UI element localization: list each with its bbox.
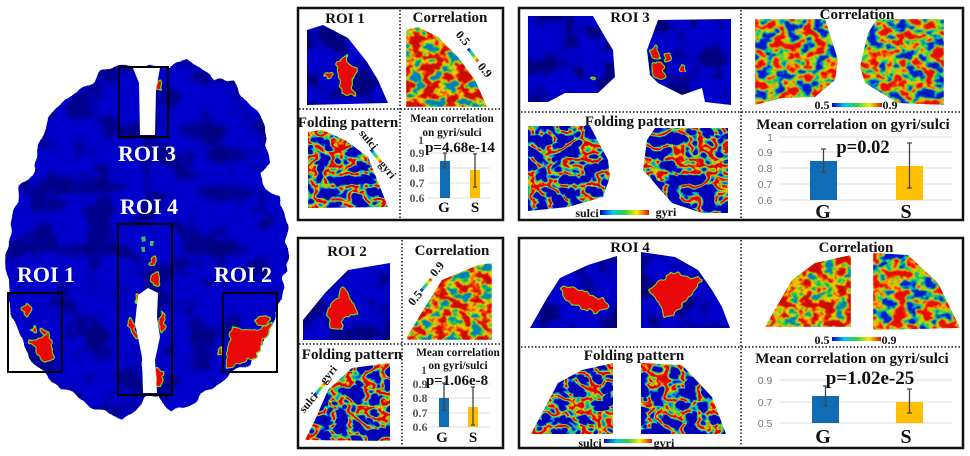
correlation scale: 0.5 bbox=[453, 28, 473, 48]
correlation map left bbox=[755, 19, 838, 105]
bar chart: 1 bbox=[767, 132, 773, 144]
ROI 3 surface map left bbox=[528, 16, 615, 102]
bar chart bbox=[410, 133, 495, 216]
bar chart: 0.7 bbox=[412, 406, 428, 420]
folding pattern map left bbox=[528, 126, 610, 211]
correlation scale: 0.9 bbox=[475, 60, 495, 80]
correlation scale: 0.9 bbox=[882, 333, 896, 347]
panel: ROI 3 bbox=[519, 7, 963, 223]
correlation map bbox=[406, 27, 487, 107]
folding scale: sulci bbox=[297, 391, 321, 415]
folding scale bbox=[297, 364, 340, 415]
bar chart: 0.7 bbox=[410, 176, 424, 190]
bar chart: 1 bbox=[421, 363, 427, 377]
heading correlation: Correlation bbox=[415, 243, 490, 259]
correlation map left bbox=[765, 255, 851, 327]
heading ROI 4: ROI 4 bbox=[610, 240, 650, 256]
heading correlation: Correlation bbox=[820, 7, 895, 23]
heading ROI 3: ROI 3 bbox=[610, 10, 650, 26]
folding pattern map bbox=[308, 130, 388, 208]
panel: ROI 4 bbox=[519, 238, 963, 450]
bar chart: 0.6 bbox=[410, 191, 424, 205]
activation: ROI 1 bbox=[23, 304, 55, 362]
bar chart: 0.7 bbox=[758, 179, 772, 191]
brain sulci shading bbox=[28, 106, 256, 371]
bar chart: G bbox=[436, 430, 448, 446]
heading mean correlation: Mean correlation bbox=[416, 347, 500, 359]
panel: ROI 1 bbox=[298, 8, 503, 220]
folding pattern map bbox=[305, 363, 390, 441]
heading folding pattern: Folding pattern bbox=[585, 114, 686, 130]
correlation scale: 0.9 bbox=[882, 98, 898, 112]
correlation scale: 0.5 bbox=[814, 98, 830, 112]
ROI 4 surface map left bbox=[530, 256, 617, 328]
heading mean correlation: Mean correlation bbox=[410, 113, 494, 125]
folding scale: gyri bbox=[654, 436, 675, 450]
bar chart: p=4.68e-14 bbox=[425, 140, 495, 156]
correlation scale bbox=[814, 333, 896, 347]
bar chart: 1 bbox=[418, 133, 424, 147]
folding scale: gyri bbox=[318, 364, 340, 386]
bar chart: 0.7 bbox=[758, 397, 772, 409]
heading correlation: Correlation bbox=[819, 240, 894, 256]
label ROI 3: ROI 3 bbox=[118, 141, 176, 166]
dividers bbox=[299, 10, 502, 218]
folding scale: sulci bbox=[578, 436, 602, 450]
heading folding pattern: Folding pattern bbox=[584, 348, 685, 364]
bar chart: 0.9 bbox=[410, 146, 424, 160]
folding scale bbox=[578, 436, 675, 450]
dividers bbox=[299, 240, 502, 446]
heading mean correlation: on gyri/sulci bbox=[422, 127, 482, 139]
bar chart: p=0.02 bbox=[836, 138, 890, 158]
folding scale: gyri bbox=[656, 205, 677, 219]
bar chart bbox=[758, 368, 952, 448]
heading correlation: Correlation bbox=[413, 10, 488, 26]
heading mean correlation: on gyri/sulci bbox=[428, 360, 488, 372]
bar chart: S bbox=[900, 201, 912, 223]
dividers bbox=[521, 10, 961, 218]
correlation scale: 0.5 bbox=[814, 333, 830, 347]
folding pattern map right bbox=[641, 363, 726, 434]
correlation map right bbox=[860, 19, 944, 105]
activation: ROI 2 bbox=[217, 316, 273, 368]
folding scale: gyri bbox=[376, 159, 398, 181]
folding scale bbox=[356, 128, 398, 181]
dividers bbox=[521, 240, 961, 446]
label ROI 4: ROI 4 bbox=[120, 194, 178, 219]
folding pattern map right bbox=[643, 128, 728, 213]
bar chart: G bbox=[815, 426, 831, 448]
ROI 3 box bbox=[119, 67, 168, 137]
bar chart: p=1.02e-25 bbox=[826, 368, 914, 389]
white gap: ROI 3 bbox=[133, 68, 160, 135]
folding scale bbox=[575, 205, 677, 220]
bar chart: G bbox=[438, 200, 450, 216]
bar chart: 0.6 bbox=[758, 195, 772, 207]
panel: whole-brain overview bbox=[8, 60, 287, 417]
folding scale: sulci bbox=[356, 128, 380, 152]
bar chart: 0.8 bbox=[412, 391, 428, 405]
bar chart: 0.8 bbox=[758, 163, 772, 175]
bar chart: S bbox=[469, 430, 477, 446]
correlation map bbox=[407, 263, 492, 340]
ROI 1 surface map bbox=[307, 25, 388, 105]
panel: ROI 2 bbox=[297, 238, 503, 448]
bar chart: 0.6 bbox=[412, 420, 428, 434]
heading mean correlation: Mean correlation on gyri/sulci bbox=[756, 117, 950, 133]
heading mean correlation: Mean correlation on gyri/sulci bbox=[755, 351, 949, 367]
bar chart: 0.8 bbox=[410, 161, 424, 175]
bar chart: 0.9 bbox=[758, 147, 772, 159]
bar chart: 0.9 bbox=[758, 375, 772, 387]
ROI 2 surface map bbox=[303, 263, 390, 340]
bar chart: 0.9 bbox=[412, 377, 428, 391]
label ROI 2: ROI 2 bbox=[214, 262, 272, 287]
bar chart: 0.5 bbox=[758, 418, 772, 430]
bar chart: G bbox=[815, 201, 831, 223]
ROI 4 box bbox=[118, 224, 172, 395]
correlation scale bbox=[453, 28, 495, 80]
activation: ROI 3 and ROI 4 bbox=[128, 79, 165, 388]
white gap: ROI 4 bbox=[135, 288, 160, 393]
heading folding pattern: Folding pattern bbox=[298, 115, 399, 131]
correlation scale bbox=[405, 259, 447, 308]
heading ROI 2: ROI 2 bbox=[327, 244, 367, 260]
ROI 1 box bbox=[8, 293, 62, 372]
correlation scale bbox=[814, 98, 898, 112]
bar chart: p=1.06e-8 bbox=[426, 373, 488, 389]
correlation scale: 0.9 bbox=[427, 259, 447, 279]
bar chart: S bbox=[471, 200, 479, 216]
heading folding pattern: Folding pattern bbox=[302, 347, 403, 363]
bar chart: S bbox=[900, 426, 912, 448]
heading ROI 1: ROI 1 bbox=[325, 11, 365, 27]
ROI 2 box bbox=[223, 293, 277, 372]
folding pattern map left bbox=[531, 363, 613, 434]
brain surface bbox=[8, 60, 287, 417]
bar chart bbox=[412, 363, 490, 446]
bar chart bbox=[758, 132, 952, 223]
correlation scale: 0.5 bbox=[405, 288, 425, 308]
ROI 4 surface map right bbox=[641, 252, 730, 328]
ROI 3 surface map right bbox=[647, 19, 731, 105]
folding scale: sulci bbox=[575, 206, 599, 220]
label ROI 1: ROI 1 bbox=[17, 262, 75, 287]
correlation map right bbox=[873, 253, 960, 330]
